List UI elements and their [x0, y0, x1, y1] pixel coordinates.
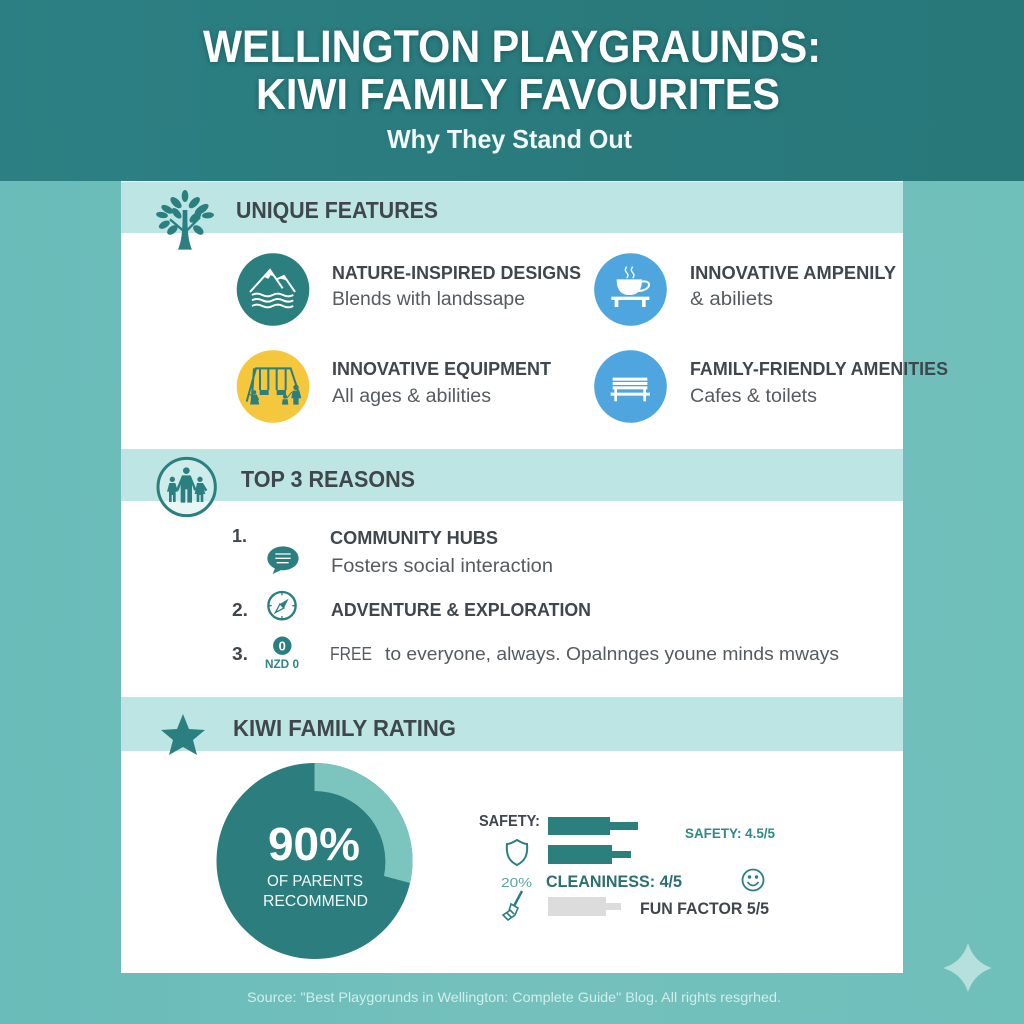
section band: kiwi family rating [121, 697, 903, 751]
label: percentage: 20% [501, 875, 533, 890]
label: fun factor score: FUN FACTOR 5/5 [640, 900, 769, 918]
icon: sparkle [943, 943, 992, 992]
text: adventure and exploration: ADVENTURE & EXPLORATION [331, 600, 591, 620]
reason 3: free [232, 636, 839, 671]
feature: nature-inspired designs [237, 253, 581, 326]
label: safety: SAFETY: [479, 813, 540, 830]
icon: mountains and water [237, 253, 309, 326]
icon: bench [594, 350, 667, 423]
label: safety score: SAFETY: 4.5/5 [685, 826, 775, 841]
source note: Source: "Best Playgorunds in Wellington: Complete Guide" Blog. All rights resgrhed. [247, 989, 781, 1005]
donut caption: RECOMMEND [263, 893, 368, 910]
caption: cafes and toilets: Cafes & toilets [690, 386, 817, 407]
bar: cleanliness [548, 845, 631, 864]
caption: and abilities: & abiliets [690, 289, 773, 310]
icon: NZD 0 coin [265, 636, 299, 671]
icon: NZD 0 coin: 0 [279, 638, 286, 654]
panel: unique features [121, 182, 948, 423]
icon: swings [237, 350, 309, 423]
number 2: 2. [232, 600, 248, 620]
feature: family-friendly amenities [594, 350, 948, 423]
caption: blends with landscape: Blends with landssape [332, 289, 525, 310]
donut caption: OF PARENTS [267, 873, 363, 890]
chart: rating bars [479, 813, 775, 920]
heading: kiwi family rating: KIWI FAMILY RATING [233, 715, 456, 741]
title: KIWI FAMILY FAVOURITES [256, 70, 780, 119]
caption: fosters social interaction: Fosters social interaction [331, 556, 553, 577]
text: free: FREE [330, 643, 372, 664]
text: family-friendly amenities: FAMILY-FRIENDLY AMENITIES [690, 359, 948, 379]
heading: unique features: UNIQUE FEATURES [236, 197, 438, 223]
icon: compass [268, 592, 296, 619]
panel: kiwi family rating [121, 697, 903, 959]
feature: innovative amenity [594, 253, 896, 326]
chart: 90 percent donut [216, 763, 413, 959]
number 3: 3. [232, 644, 248, 664]
icon: tree [156, 190, 214, 250]
label: cleanliness score: CLEANINESS: 4/5 [546, 873, 682, 891]
section band: unique features [121, 182, 903, 233]
icon: family in circle [158, 458, 215, 516]
heading: top 3 reasons: TOP 3 REASONS [241, 466, 415, 492]
icon: broom [503, 891, 522, 920]
header banner [0, 0, 1024, 181]
section band: top 3 reasons [121, 449, 903, 501]
bar: fun factor [548, 897, 621, 916]
icon: NZD 0 coin: NZD 0 [265, 659, 299, 671]
donut caption [263, 873, 368, 910]
title [203, 21, 821, 119]
reason 1: community hubs [232, 526, 553, 577]
icon: shield [507, 840, 527, 865]
icon: coffee cup on table [594, 253, 667, 326]
icon: smiley [742, 870, 764, 890]
title: WELLINGTON PLAYGRAUNDS: [203, 21, 821, 72]
reason 2: adventure and exploration [232, 592, 591, 620]
main white panel [121, 181, 903, 973]
text: innovative equipment: INNOVATIVE EQUIPMENT [332, 359, 551, 379]
feature: innovative equipment [237, 350, 551, 423]
icon: star [161, 714, 205, 755]
subtitle: Why They Stand Out [387, 124, 632, 154]
number 1: 1. [232, 526, 247, 546]
icon: speech bubble [267, 546, 299, 574]
text: innovative amenity: INNOVATIVE AMPENILY [690, 263, 896, 283]
text: to everyone, always: to everyone, always. Opalnnges youne minds mways [385, 643, 839, 664]
text: community hubs: COMMUNITY HUBS [330, 528, 498, 548]
text: nature-inspired designs: NATURE-INSPIRED DESIGNS [332, 263, 581, 283]
bar: safety [548, 817, 638, 835]
caption: all ages and abilities: All ages & abilities [332, 386, 491, 407]
panel: top 3 reasons [121, 449, 903, 671]
donut value: 90% [268, 818, 360, 870]
